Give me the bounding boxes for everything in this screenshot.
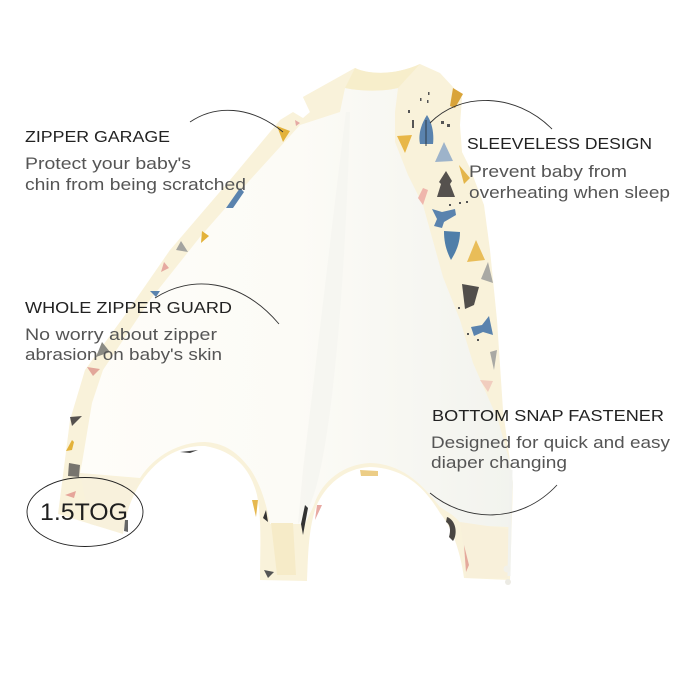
left cuff xyxy=(80,473,140,533)
print: left strip xyxy=(65,120,300,532)
heading: BOTTOM SNAP FASTENER xyxy=(432,408,664,425)
dark tree xyxy=(437,171,455,197)
lower pink and grey trees xyxy=(480,380,493,392)
callout: sleeveless design: overheating when sleep xyxy=(469,184,670,202)
top yellow tree xyxy=(450,88,463,108)
scattered marks xyxy=(408,92,479,341)
garment white lining xyxy=(80,88,513,527)
armhole yellow tree xyxy=(459,165,470,184)
dark cone xyxy=(462,284,479,309)
blue rabbit xyxy=(432,209,456,228)
callout: whole zipper guard: abrasion on baby's skin xyxy=(25,346,222,364)
heading: ZIPPER GARAGE xyxy=(25,129,170,146)
badge: 1.5 TOG xyxy=(27,478,143,546)
garment outer printed fabric xyxy=(58,64,513,581)
print: leg openings xyxy=(180,450,469,578)
description: No worry about zipper xyxy=(25,326,218,344)
leader line xyxy=(155,284,279,324)
center cuff xyxy=(271,523,296,575)
badge text: 1.5TOG xyxy=(40,499,128,526)
callout: whole zipper guard xyxy=(25,284,279,364)
description: Designed for quick and easy xyxy=(431,434,671,452)
right cuff xyxy=(460,522,508,578)
heading: WHOLE ZIPPER GUARD xyxy=(25,300,232,317)
garment: open sleep sack xyxy=(58,64,513,585)
dotted blue tree xyxy=(435,142,453,162)
leader line xyxy=(190,110,283,132)
blue tree xyxy=(419,115,433,144)
white zipper edge with snaps xyxy=(504,470,511,585)
callout: sleeveless design xyxy=(430,100,670,202)
lower blue tree xyxy=(444,231,460,260)
leader line xyxy=(430,485,557,515)
shoulder band xyxy=(303,68,355,117)
leader line xyxy=(430,100,552,129)
pink tree xyxy=(418,188,428,205)
print: right panel trees and rabbits xyxy=(397,88,497,392)
callout: zipper garage xyxy=(25,110,283,194)
lower yellow tree xyxy=(467,240,485,262)
heading: SLEEVELESS DESIGN xyxy=(467,136,652,153)
center fold shading xyxy=(298,112,350,524)
description: Prevent baby from xyxy=(469,163,627,181)
yellow tree xyxy=(397,135,412,153)
right blue rabbit xyxy=(471,316,493,336)
callout: bottom snap fastener: diaper changing xyxy=(431,454,567,472)
grey tree xyxy=(481,262,493,283)
badge outline xyxy=(27,478,143,546)
collar band xyxy=(345,64,420,91)
description: Protect your baby's xyxy=(25,155,191,173)
callout: bottom snap fastener xyxy=(430,408,671,515)
callout: zipper garage: chin from being scratched xyxy=(25,176,246,194)
